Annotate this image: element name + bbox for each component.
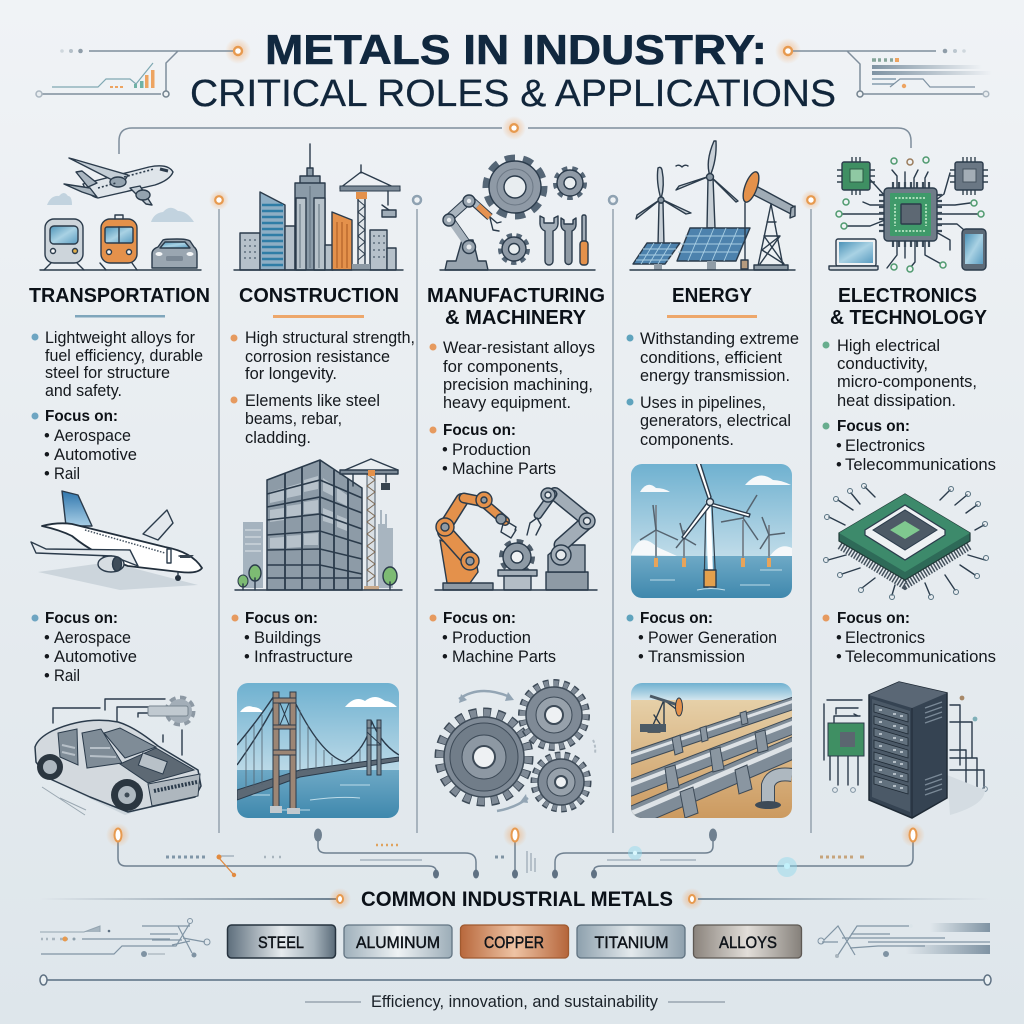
illustration: chip on circuit board: [824, 484, 988, 600]
panel: energy text: [626, 284, 799, 449]
illustration: two robotic arms: [435, 488, 597, 590]
panel: manufacturing text: MANUFACTURING: [427, 284, 605, 307]
panel: focus list energy: Focus on:: [640, 610, 713, 627]
panel: focus list manufacturing: •: [442, 629, 448, 647]
panel: manufacturing text: & MACHINERY: [445, 306, 586, 329]
metal tag: titanium: TITANIUM: [594, 933, 668, 952]
panel: manufacturing text: •: [442, 460, 448, 478]
panel: focus list manufacturing: Machine Parts: [452, 648, 556, 666]
panel: energy text: energy transmission.: [640, 367, 790, 385]
panel: transportation text: Aerospace: [54, 427, 131, 445]
metal tag: aluminum: [344, 925, 452, 958]
panel: electronics text: Electronics: [845, 437, 925, 455]
panel: focus list construction: Focus on:: [245, 610, 318, 627]
panel: electronics text: heat dissipation.: [837, 392, 956, 410]
panel: construction text: corrosion resistance: [245, 348, 390, 366]
panel: manufacturing text: Wear-resistant alloys: [443, 339, 595, 357]
metal tag: steel: [228, 925, 336, 958]
panel: focus list construction: •: [244, 629, 250, 647]
panel: electronics text: & TECHNOLOGY: [830, 306, 987, 329]
panel: focus list transportation: Aerospace: [54, 629, 131, 647]
panel: focus list energy: Power Generation: [648, 629, 777, 647]
panel: transportation text: fuel efficiency, durable: [45, 347, 203, 365]
panel: focus list transportation: •: [44, 648, 50, 666]
divider: bottom rule with end nodes: [40, 975, 991, 985]
panel: energy text: Withstanding extreme: [640, 330, 799, 348]
illustration: car body with gear: [35, 698, 201, 815]
column dividers: [209, 190, 821, 833]
metal tag: alloys: [694, 925, 802, 958]
panel: focus list transportation: Rail: [54, 667, 80, 685]
panel: focus list energy: •: [638, 629, 644, 647]
panel: focus list electronics: Electronics: [845, 629, 925, 647]
panel: electronics text: High electrical: [837, 337, 940, 355]
icon: city skyline and crane: [234, 144, 403, 270]
panel: construction text: [230, 284, 415, 447]
panel: construction text: High structural strength,: [245, 329, 415, 347]
icon: robot arm, gears and tools: [440, 159, 595, 270]
panel: focus list transportation: •: [44, 667, 50, 685]
illustration: server rack with chip: [824, 682, 987, 818]
connector: header bracket: [119, 116, 911, 154]
illustration: pipeline panel: [625, 683, 800, 820]
section heading: common industrial metals: COMMON INDUSTRIAL METALS: [361, 888, 673, 911]
panel: focus list transportation: [32, 610, 137, 685]
panel: transportation text: steel for structure: [45, 364, 170, 382]
illustration: gear cluster: [440, 684, 595, 811]
connector circuit: bottom wires: [106, 823, 925, 878]
panel: transportation text: Automotive: [54, 446, 137, 464]
panel: manufacturing text: Focus on:: [443, 422, 516, 439]
panel: manufacturing text: heavy equipment.: [443, 394, 571, 412]
panel: focus list manufacturing: Production: [452, 629, 531, 647]
panel: manufacturing text: [427, 284, 605, 478]
panel: transportation text: Lightweight alloys for: [45, 329, 195, 347]
panel: electronics text: [822, 284, 996, 474]
panel: construction text: CONSTRUCTION: [239, 284, 399, 307]
panel: focus list transportation: Automotive: [54, 648, 137, 666]
panel: electronics text: ELECTRONICS: [838, 284, 977, 307]
metal tag: titanium: [577, 925, 685, 958]
panel: manufacturing text: •: [442, 441, 448, 459]
panel: focus list electronics: •: [836, 629, 842, 647]
panel: focus list manufacturing: •: [442, 648, 448, 666]
panel: focus list construction: Infrastructure: [254, 648, 353, 666]
title: CRITICAL ROLES & APPLICATIONS: [190, 73, 836, 115]
panel: transportation text: and safety.: [45, 382, 122, 400]
panel: energy text: Uses in pipelines,: [640, 394, 766, 412]
panel: focus list construction: Buildings: [254, 629, 321, 647]
panel: electronics text: •: [836, 456, 842, 474]
icon: transportation group: [40, 158, 201, 270]
panel: transportation text: Focus on:: [45, 408, 118, 425]
panel: energy text: ENERGY: [672, 284, 752, 307]
panel: transportation text: •: [44, 446, 50, 464]
panel: manufacturing text: Production: [452, 441, 531, 459]
panel: transportation text: •: [44, 427, 50, 445]
panel: focus list electronics: •: [836, 648, 842, 666]
panel: construction text: beams, rebar,: [245, 410, 342, 428]
panel: construction text: for longevity.: [245, 365, 337, 383]
title: METALS IN INDUSTRY:: [265, 26, 767, 73]
metal tag: alloys: ALLOYS: [719, 933, 777, 952]
panel: transportation text: TRANSPORTATION: [29, 284, 210, 307]
decoration: top-left circuit with mini chart: [36, 38, 251, 97]
panel: focus list electronics: Focus on:: [837, 610, 910, 627]
decoration: left circuit beside metals: [40, 918, 210, 958]
panel: electronics text: Focus on:: [837, 418, 910, 435]
panel: transportation text: Rail: [54, 465, 80, 483]
metal tag: copper: COPPER: [484, 933, 544, 952]
panel: manufacturing text: Machine Parts: [452, 460, 556, 478]
panel: energy text: conditions, efficient: [640, 349, 782, 367]
panel: construction text: Elements like steel: [245, 392, 380, 410]
panel: focus list electronics: Telecommunications: [845, 648, 996, 666]
illustration: suspension bridge panel: [237, 683, 399, 818]
panel: focus list construction: [232, 610, 353, 666]
panel: focus list transportation: •: [44, 629, 50, 647]
illustration: steel building frame and crane: [235, 459, 402, 590]
panel: focus list transportation: Focus on:: [45, 610, 118, 627]
title: [190, 26, 836, 115]
icon: wind turbines, solar panels and oil pump: [630, 141, 795, 270]
panel: electronics text: •: [836, 437, 842, 455]
panel: electronics text: Telecommunications: [845, 456, 996, 474]
metal tag: copper: [460, 925, 568, 958]
panel: focus list manufacturing: [430, 610, 556, 666]
panel: electronics text: micro-components,: [837, 373, 977, 391]
panel: energy text: generators, electrical: [640, 412, 791, 430]
decoration: top-right circuit with data bars: [775, 38, 992, 97]
panel: transportation text: •: [44, 465, 50, 483]
illustration: offshore wind farm panel: [631, 459, 792, 598]
panel: manufacturing text: for components,: [443, 358, 563, 376]
panel: focus list manufacturing: Focus on:: [443, 610, 516, 627]
icon: processor with traces and devices: [829, 157, 988, 272]
decoration: right circuit beside metals: [818, 923, 990, 958]
panel: focus list electronics: [822, 610, 996, 666]
footer tagline: Efficiency, innovation, and sustainability: [371, 993, 659, 1011]
panel: focus list energy: •: [638, 648, 644, 666]
panel: manufacturing text: precision machining,: [443, 376, 593, 394]
panel: electronics text: conductivity,: [837, 355, 928, 373]
panel: focus list energy: Transmission: [648, 648, 745, 666]
metal tag: aluminum: ALUMINUM: [356, 933, 440, 952]
panel: focus list energy: [626, 610, 777, 666]
panel: focus list construction: •: [244, 648, 250, 666]
panel: energy text: components.: [640, 431, 734, 449]
illustration: airliner: [31, 491, 202, 590]
section heading: common industrial metals: [40, 888, 990, 911]
metal tag: steel: STEEL: [258, 933, 304, 952]
panel: transportation text: [29, 284, 210, 483]
panel: construction text: cladding.: [245, 429, 311, 447]
